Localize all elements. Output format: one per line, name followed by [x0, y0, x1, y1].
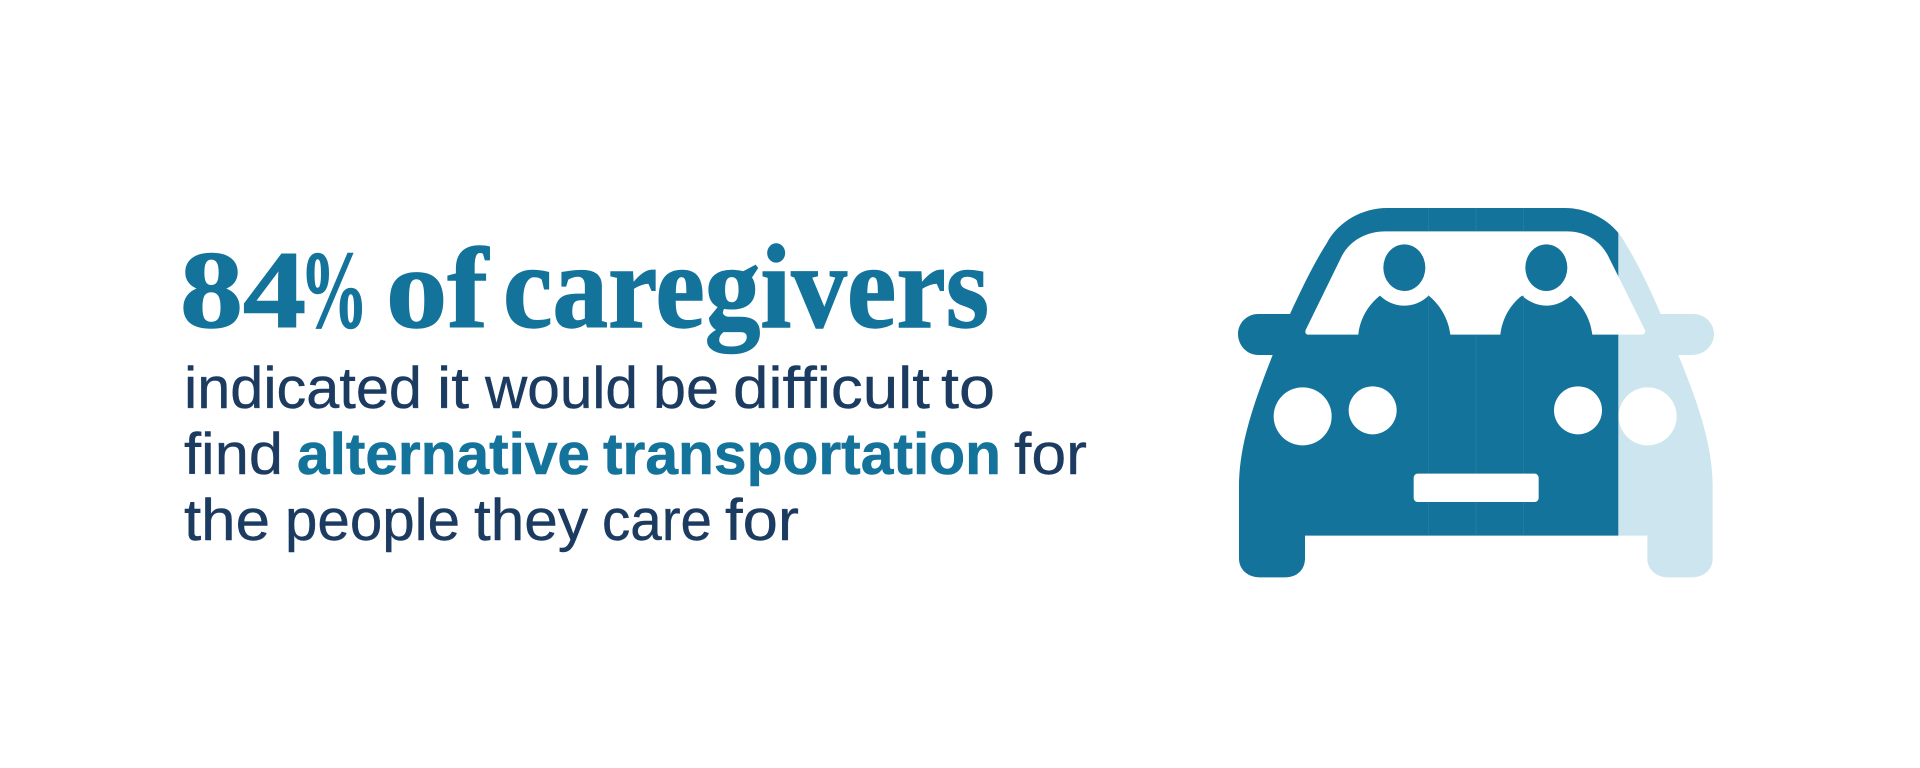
line 1 [184, 356, 995, 421]
line 3 [184, 488, 799, 553]
heading: 84% of caregivers [180, 220, 989, 354]
line 3: the [184, 488, 270, 553]
heading: 84% of caregivers: % [300, 229, 368, 351]
line 2 with highlight: alternative transportation: for [1014, 422, 1087, 487]
line 2 with highlight: alternative transportation: alternative [297, 422, 590, 487]
headlight outer left [1274, 387, 1332, 445]
car dark portion [1238, 208, 1618, 578]
license plate [1414, 474, 1539, 502]
icon: car with two passengers, 84% filled [1238, 208, 1714, 577]
line 1: indicated [184, 356, 422, 421]
headlight inner left [1349, 386, 1397, 434]
line 2 with highlight: alternative transportation: find [184, 422, 283, 487]
car light portion [1618, 233, 1714, 578]
passenger head left [1383, 244, 1425, 291]
text block: supporting statement [184, 356, 1087, 553]
line 3: they [474, 488, 588, 553]
line 3: care [602, 488, 712, 553]
heading: 84% of caregivers: 84 [180, 229, 306, 351]
heading: 84% of caregivers: caregivers [503, 220, 989, 354]
line 2 with highlight: alternative transportation [184, 422, 1087, 487]
line 1: it [437, 356, 469, 421]
line 1: be [653, 356, 719, 421]
headlight inner right [1554, 386, 1602, 434]
passenger head right [1525, 244, 1567, 291]
line 2 with highlight: alternative transportation: transportation [603, 422, 1001, 487]
line 3: for [725, 488, 799, 553]
line 3: people [285, 488, 460, 553]
line 1: would [484, 356, 638, 421]
heading: 84% of caregivers: of [386, 225, 490, 352]
line 1: to [941, 356, 995, 421]
line 1: difficult [733, 356, 930, 421]
